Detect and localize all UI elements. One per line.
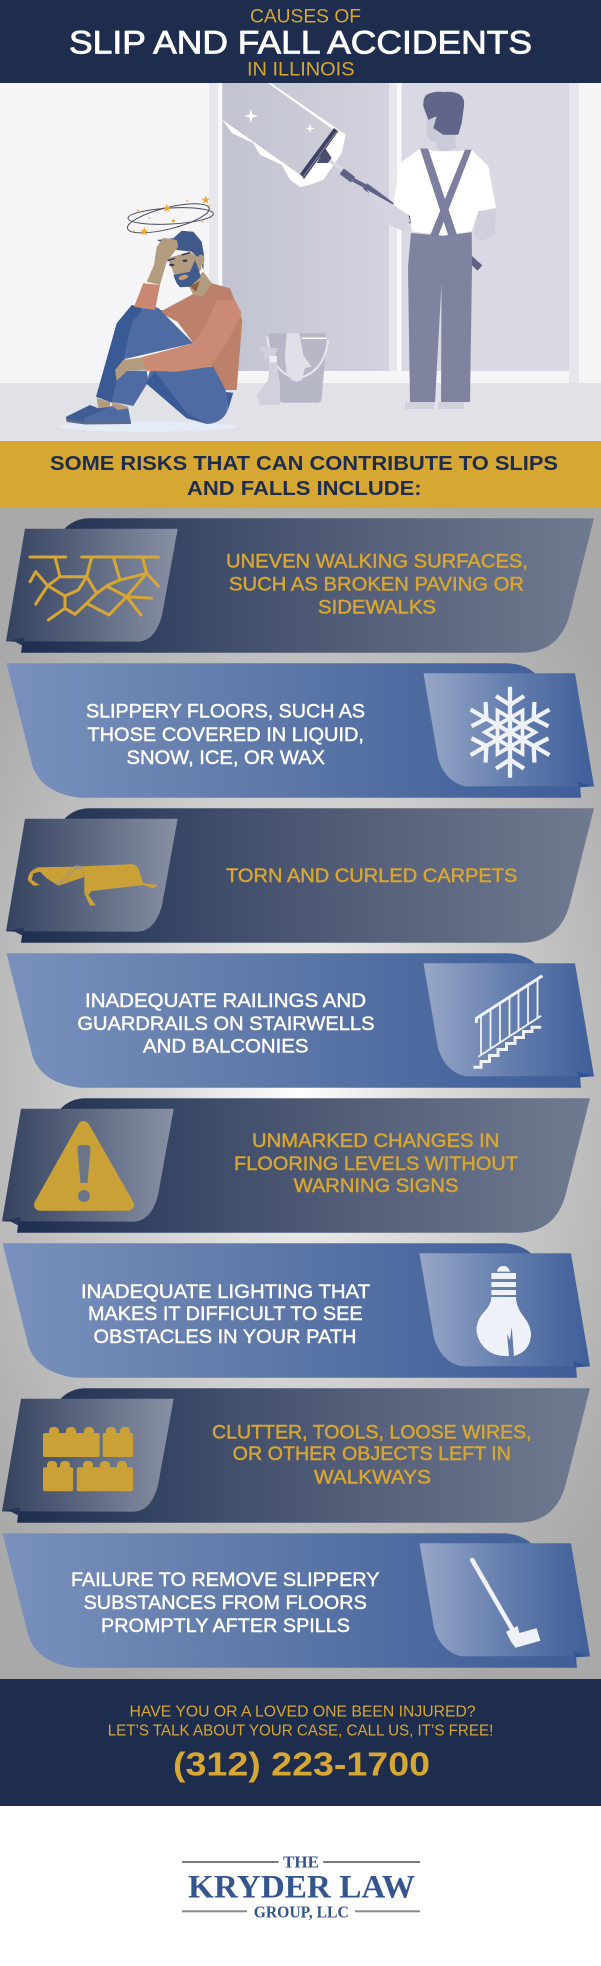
squeegee cleaned streak and soap xyxy=(222,83,346,187)
icon: broken light bulb xyxy=(476,1266,531,1356)
hip and lower leg xyxy=(146,367,228,424)
hero illustration xyxy=(0,83,601,441)
icon: snowflake xyxy=(464,687,556,778)
panel 7 text: WALKWAYS xyxy=(314,1466,431,1488)
icon: toy building blocks xyxy=(43,1427,133,1491)
shoes xyxy=(66,405,110,423)
panel 2 text: SLIPPERY FLOORS, SUCH AS xyxy=(86,701,365,723)
panel 5 text: WARNING SIGNS xyxy=(294,1175,458,1197)
panel 6 text: OBSTACLES IN YOUR PATH xyxy=(94,1326,356,1348)
far leg xyxy=(96,305,143,403)
hair xyxy=(423,92,464,135)
law firm logo xyxy=(182,1853,420,1921)
logo text: kryder law: KRYDER LAW xyxy=(188,1870,415,1906)
injured seated man xyxy=(60,196,242,432)
panel 2 text: THOSE COVERED IN LIQUID, xyxy=(87,724,364,746)
header banner xyxy=(0,0,601,83)
logo text: group llc: GROUP, LLC xyxy=(254,1902,349,1921)
panel 3 text: TORN AND CURLED CARPETS xyxy=(226,865,517,887)
shin xyxy=(112,371,148,406)
gold subheading band: AND FALLS INCLUDE: xyxy=(187,477,422,500)
phone number: (312) 223-1700 xyxy=(173,1746,430,1783)
raised sleeve xyxy=(134,283,160,310)
logo text: the: THE xyxy=(283,1853,319,1872)
panel 3: torn carpets xyxy=(6,808,594,943)
torso xyxy=(155,283,242,390)
icon: mop xyxy=(472,1560,540,1648)
panel 8: failure to remove spills xyxy=(2,1533,590,1668)
floor shadow xyxy=(60,422,236,432)
man with squeegee xyxy=(300,92,496,409)
panel 4: inadequate railings xyxy=(6,953,594,1088)
panel 1 text xyxy=(226,551,528,618)
title line: slip and fall accidents: SLIP AND FALL ACCIDENTS xyxy=(69,24,532,60)
front sleeve xyxy=(142,300,242,372)
panel 8 text xyxy=(71,1569,380,1637)
icon: stair railing xyxy=(473,976,542,1067)
panel 1: uneven walking surfaces xyxy=(6,518,594,653)
call to action footer xyxy=(0,1679,601,1806)
panel 7: clutter and tools xyxy=(2,1388,590,1523)
panel 5 text: UNMARKED CHANGES IN xyxy=(252,1130,499,1152)
face xyxy=(167,252,202,286)
panel 7 text: CLUTTER, TOOLS, LOOSE WIRES, xyxy=(212,1421,532,1443)
neck xyxy=(188,272,212,297)
panel 2: slippery floors xyxy=(6,663,594,798)
dizzy stars xyxy=(125,196,214,239)
panel 4 text: AND BALCONIES xyxy=(143,1036,308,1058)
raised forearm xyxy=(367,190,410,231)
near thigh xyxy=(123,306,193,359)
panel 4 text xyxy=(77,990,375,1058)
panel 5: unmarked flooring changes xyxy=(2,1098,590,1233)
icon: cracked pavement xyxy=(30,557,158,620)
panel 6: inadequate lighting xyxy=(2,1243,590,1378)
title line: causes of: CAUSES OF xyxy=(250,7,361,28)
hand on knee xyxy=(115,357,146,381)
panel 7 text: OR OTHER OBJECTS LEFT IN xyxy=(233,1443,511,1465)
trousers xyxy=(408,232,472,402)
panel 6 text: MAKES IT DIFFICULT TO SEE xyxy=(88,1303,363,1325)
shirt xyxy=(393,149,496,236)
ankles xyxy=(97,398,110,408)
panel 5 text: FLOORING LEVELS WITHOUT xyxy=(234,1153,518,1175)
arm to head xyxy=(147,238,178,285)
title line: in illinois: IN ILLINOIS xyxy=(247,60,354,81)
panel 1 text: SUCH AS BROKEN PAVING OR xyxy=(229,574,524,596)
panel 7 text xyxy=(212,1421,532,1488)
window frames xyxy=(209,83,579,383)
suspenders xyxy=(420,148,457,236)
panel 8 text: PROMPTLY AFTER SPILLS xyxy=(101,1615,350,1637)
grey gradient section background xyxy=(0,508,601,1679)
beard xyxy=(173,260,201,287)
panel 8 text: SUBSTANCES FROM FLOORS xyxy=(84,1592,367,1614)
panel 2 text xyxy=(86,701,365,769)
icon: curled carpet xyxy=(28,864,158,906)
bucket with glove and spray bottle xyxy=(257,333,328,405)
call to action footer: LET’S TALK ABOUT YOUR CASE, CALL US, IT’S FREE! xyxy=(108,1722,493,1739)
gold subheading band xyxy=(0,441,601,508)
panel 8 text: FAILURE TO REMOVE SLIPPERY xyxy=(71,1569,380,1591)
panel 1 text: SIDEWALKS xyxy=(318,596,436,618)
icon: warning triangle xyxy=(40,1127,128,1205)
cta text: HAVE YOU OR A LOVED ONE BEEN INJURED? xyxy=(130,1703,476,1720)
panel 5 text xyxy=(234,1130,518,1197)
squeegee xyxy=(300,128,480,268)
panel 6 text: INADEQUATE LIGHTING THAT xyxy=(81,1281,370,1303)
panel 1 text: UNEVEN WALKING SURFACES, xyxy=(226,551,528,573)
panel 4 text: INADEQUATE RAILINGS AND xyxy=(85,990,366,1012)
panel 2 text: SNOW, ICE, OR WAX xyxy=(126,747,325,769)
hair xyxy=(157,231,204,270)
panel 4 text: GUARDRAILS ON STAIRWELLS xyxy=(77,1013,375,1035)
panel 6 text xyxy=(81,1281,370,1348)
subheading text: SOME RISKS THAT CAN CONTRIBUTE TO SLIPS xyxy=(50,452,558,475)
